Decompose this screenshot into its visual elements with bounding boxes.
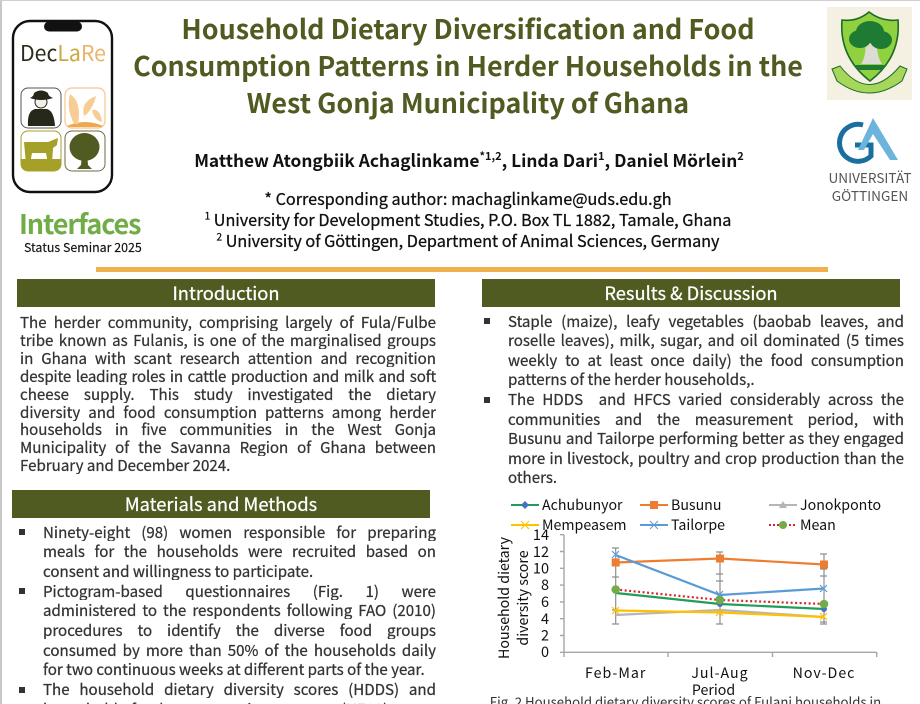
- x axis labels: Nov-Dec: [793, 663, 855, 683]
- heading: Results and Discussion: Results & Discussion: [604, 280, 778, 306]
- x axis labels: [585, 663, 855, 683]
- logo: University of Göttingen: UNIVERSITÄT: [828, 167, 912, 187]
- heading: Materials and Methods: Materials and Methods: [125, 491, 317, 517]
- heading: Introduction: [17, 279, 435, 307]
- x axis labels: Feb-Mar: [585, 663, 646, 683]
- heading: Results and Discussion: [482, 279, 900, 307]
- chart legend: [511, 495, 881, 535]
- chart legend: Tailorpe: [671, 515, 725, 535]
- y axis numbers: 10: [533, 558, 549, 578]
- heading: Materials and Methods: [12, 490, 430, 518]
- affiliations: * Corresponding author: machaglinkame@uds.edu.gh: [264, 186, 672, 210]
- title: [133, 8, 803, 121]
- text: results list: [484, 312, 904, 486]
- logo: university crest: [827, 7, 912, 100]
- affiliations: 1 University for Development Studies, P.O. Box TL 1882, Tamale, Ghana: [205, 207, 731, 231]
- title: West Gonja Municipality of Ghana: [247, 82, 689, 121]
- text: introduction paragraph: [20, 313, 436, 474]
- y axis title: Household dietary: [494, 536, 514, 659]
- y axis numbers: 8: [541, 574, 549, 595]
- title: Household Dietary Diversification and Food: [181, 8, 755, 47]
- logo: DecLaRe phone: [12, 20, 114, 194]
- heading: Introduction: Introduction: [172, 280, 280, 306]
- affiliations: 2 University of Göttingen, Department of Animal Sciences, Germany: [216, 228, 720, 252]
- logo: University of Göttingen: GÖTTINGEN: [832, 185, 908, 205]
- y axis numbers: 14: [533, 524, 549, 545]
- y axis numbers: 2: [541, 624, 549, 646]
- chart legend: Achubunyor: [542, 495, 623, 515]
- y axis numbers: 0: [541, 641, 549, 662]
- status seminar label: Status Seminar 2025: [24, 238, 142, 256]
- axes: [560, 535, 877, 657]
- chart legend: Busunu: [671, 495, 721, 515]
- y axis title: diversity score: [513, 550, 533, 646]
- y axis title: [494, 536, 533, 659]
- y axis numbers: 6: [541, 591, 549, 612]
- chart legend: Mempeasem: [542, 515, 627, 535]
- text: materials and methods list: [19, 523, 436, 704]
- y axis numbers: [533, 524, 549, 662]
- logo: DecLaRe phone: DecLaRe: [20, 36, 106, 68]
- error bars: [612, 548, 827, 624]
- logo: Interfaces: Interfaces: [19, 203, 140, 242]
- logo: University of Göttingen: [828, 118, 912, 205]
- authors: Matthew Atongbiik Achaglinkame*1,2, Linda Dari1, Daniel Mörlein2: [194, 147, 744, 172]
- chart legend: Jonokponto: [800, 495, 881, 515]
- line chart: household dietary diversity score: [490, 495, 881, 704]
- title: Consumption Patterns in Herder Households in the: [133, 45, 803, 84]
- series lines: [611, 551, 828, 620]
- y axis numbers: 4: [541, 608, 549, 629]
- chart legend: Mean: [800, 515, 836, 535]
- y axis numbers: 12: [533, 541, 549, 562]
- affiliations: [205, 186, 731, 252]
- x axis title: Period: [692, 680, 735, 700]
- x axis labels: Jul-Aug: [691, 663, 749, 683]
